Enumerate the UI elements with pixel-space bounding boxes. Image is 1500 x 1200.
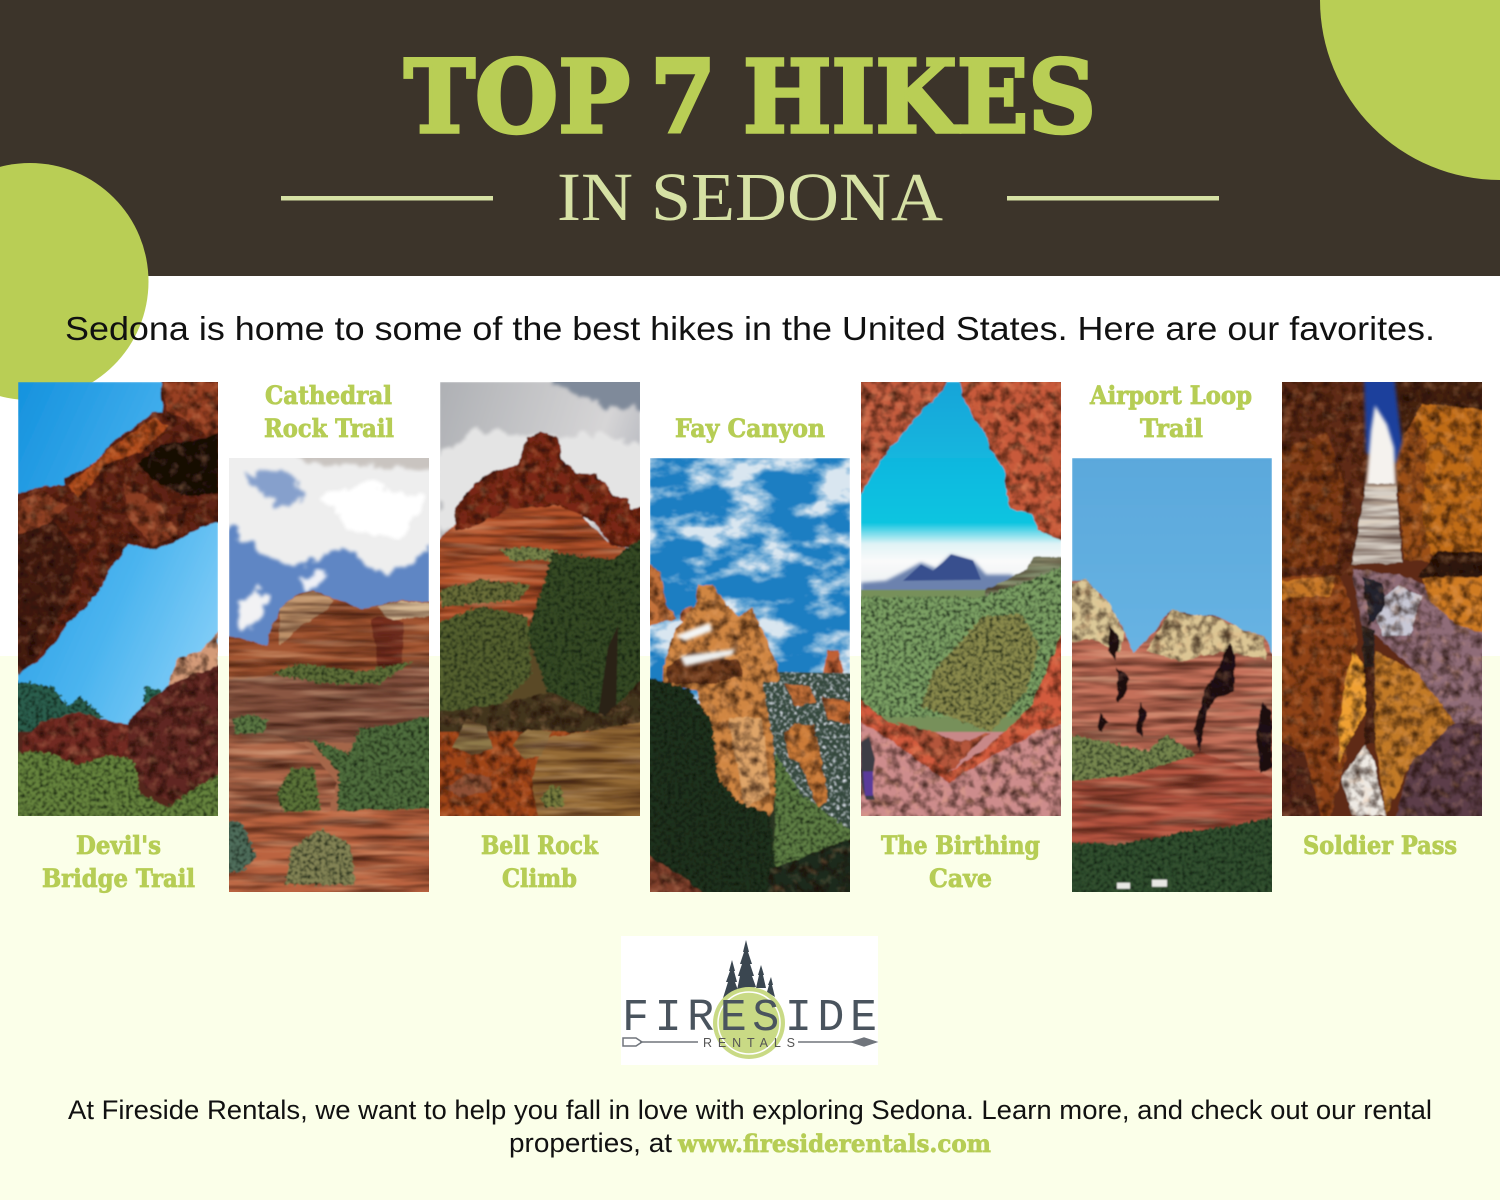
photo: Fay Canyon (645, 458, 855, 905)
decorative circle: left (0, 163, 148, 400)
label: Fay Canyon: Fay Canyon (675, 414, 825, 443)
page background: white band (0, 276, 1500, 656)
header band (0, 0, 1500, 276)
title (404, 38, 1096, 156)
icon: arrows (623, 1038, 876, 1046)
wordmark: RENTALS: RENTALS (703, 1036, 795, 1050)
label: Airport Loop Trail (1089, 381, 1252, 443)
footer text (68, 1095, 1432, 1158)
footer text: properties, at (509, 1128, 673, 1158)
photo: Cathedral Rock Trail (229, 458, 429, 892)
label: Devil's Bridge Trail: Bridge Trail (42, 864, 195, 893)
intro text: Sedona is home to some of the best hikes in the United States. Here are our favorites. (65, 310, 1435, 347)
photo: Airport Loop Trail (1067, 458, 1277, 905)
page background: pale green band (0, 656, 1500, 1200)
label: Bell Rock Climb: Climb (502, 864, 577, 893)
label: Cathedral Rock Trail: Rock Trail (264, 414, 394, 443)
label: Bell Rock Climb (481, 831, 599, 893)
label: Airport Loop Trail: Trail (1140, 414, 1203, 443)
footer link: www.firesiderentals.com (677, 1129, 991, 1158)
wordmark: FIRESIDE: FIRESIDE (622, 993, 877, 1044)
photo: Bell Rock Climb (440, 382, 640, 816)
photo: Soldier Pass (1282, 382, 1482, 816)
label: Cathedral Rock Trail (264, 381, 394, 443)
label: Bell Rock Climb: Bell Rock (481, 831, 599, 860)
footer text: At Fireside Rentals, we want to help you fall in love with exploring Sedona. Learn more, and check out our rental (68, 1095, 1432, 1125)
label: Cathedral Rock Trail: Cathedral (265, 381, 392, 410)
label: Devil's Bridge Trail (42, 831, 195, 893)
photo: Devil's Bridge Trail (18, 382, 218, 816)
label: Devil's Bridge Trail: Devil's (76, 831, 161, 860)
label: The Birthing Cave: The Birthing (881, 831, 1040, 860)
subtitle with rules (281, 159, 1219, 235)
subtitle with rules: IN SEDONA (557, 159, 943, 235)
label: The Birthing Cave (881, 831, 1040, 893)
label: Soldier Pass: Soldier Pass (1303, 831, 1457, 860)
decorative circle: top right (1320, 0, 1500, 180)
label: The Birthing Cave: Cave (929, 864, 992, 893)
icon: pine trees (723, 940, 775, 998)
title: 7 (650, 38, 716, 156)
title: HIKES (743, 38, 1096, 156)
photo: The Birthing Cave (861, 382, 1061, 816)
label: Airport Loop Trail: Airport Loop (1089, 381, 1252, 410)
icon: green circle (713, 987, 785, 1059)
title: TOP (404, 38, 630, 156)
logo: Fireside Rentals (621, 936, 878, 1065)
